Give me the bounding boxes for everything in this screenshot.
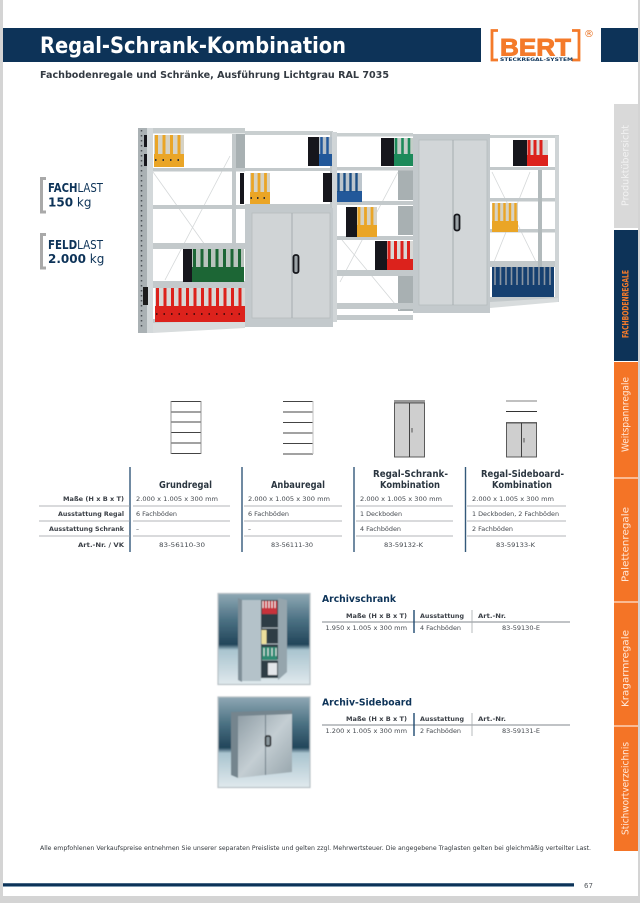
Archiv-Sideboard table: 83-59131-E [502, 728, 540, 735]
Archiv-Sideboard heading: Archiv-Sideboard [322, 698, 412, 708]
logo: BERT [492, 29, 594, 62]
tab: Kragarmregale [614, 602, 638, 726]
column: Regal-Sideboard-Kombination [472, 469, 564, 549]
column: Anbauregal: 2.000 x 1.005 x 300 mm [248, 496, 330, 503]
column: Grundregal: – [136, 526, 139, 533]
binders: red [155, 288, 245, 322]
tab: Produktübersicht: Produktübersicht [620, 125, 632, 206]
footer rule [3, 883, 574, 887]
tab: Kragarmregale: Kragarmregale [620, 630, 632, 707]
binders: yellow bay four [492, 203, 518, 232]
Archiv-Sideboard table [322, 713, 570, 736]
row labels: Maße (H x B x T) [63, 496, 124, 503]
binders: red top of bay four [513, 140, 548, 166]
logo: BERT: STECKREGAL-SYSTEM [500, 57, 573, 62]
cabinet: tall [413, 134, 490, 313]
footnote: Alle empfohlenen Verkaufspreise entnehmen Sie unserer separaten Preisliste und gelten zzgl. Mehrwertsteuer. Die angegebene Traglasten gelten bei gleichmäßig verteilter Last. [40, 845, 591, 852]
tab: Palettenregale [614, 478, 638, 602]
column: Regal-Schrank-Kombination: 4 Fachböden [360, 526, 401, 533]
tab: Stichwortverzeichnis [614, 726, 638, 851]
column: Grundregal: 6 Fachböden [136, 511, 177, 518]
column: Regal-Schrank-Kombination [360, 469, 448, 549]
product photo: shelving with cabinets [138, 128, 559, 333]
black binders on shelf two [240, 173, 332, 204]
Archivschrank table: Art.-Nr. [478, 613, 506, 620]
Archiv-Sideboard table: Maße (H x B x T) [346, 716, 407, 723]
side tabs [614, 104, 638, 851]
column: Regal-Schrank-Kombination: Kombination [380, 480, 440, 491]
tab: Stichwortverzeichnis: Stichwortverzeichnis [620, 742, 632, 835]
column: Anbauregal: – [248, 526, 251, 533]
binders: blue shelf two of bay three [337, 173, 362, 202]
row labels: Ausstattung Schrank [49, 526, 125, 533]
Archivschrank table: 1.950 x 1.005 x 300 mm [326, 625, 407, 632]
subtitle: Fachbodenregale und Schränke, Ausführung Lichtgrau RAL 7035 [40, 70, 389, 81]
Archiv-Sideboard table: Ausstattung [420, 716, 464, 723]
tab: Weitspannregale [614, 362, 638, 478]
comparison table [39, 467, 566, 552]
page number: 67 [584, 882, 593, 890]
photo: Archivschrank [218, 594, 310, 684]
tab: Weitspannregale: Weitspannregale [620, 377, 632, 452]
load callout: Fachlast: FACHLAST [48, 181, 104, 195]
column: Regal-Sideboard-Kombination: 83-59133-K [496, 542, 536, 549]
column: Regal-Sideboard-Kombination: 2.000 x 1.005 x 300 mm [472, 496, 554, 503]
column: Grundregal: Grundregal [159, 480, 212, 491]
tab: Palettenregale: Palettenregale [620, 507, 632, 582]
tab: Produktübersicht [614, 104, 638, 228]
column: Anbauregal: 6 Fachböden [248, 511, 289, 518]
binders: yellow shelf two [250, 173, 270, 204]
row labels [49, 496, 125, 549]
Archivschrank heading: Archivschrank [322, 594, 397, 605]
column: Anbauregal [248, 480, 330, 549]
load callout: Fachlast [42, 178, 104, 212]
bay 4 shelves [490, 135, 559, 138]
binders: green [183, 249, 244, 282]
column: Grundregal [136, 480, 218, 549]
column: Regal-Schrank-Kombination: 2.000 x 1.005 x 300 mm [360, 496, 442, 503]
bay 3 shelves [333, 133, 413, 136]
column: Anbauregal: Anbauregal [271, 480, 325, 491]
bay 1 shelves and frame [140, 168, 245, 323]
column: Regal-Sideboard-Kombination: 2 Fachböden [472, 526, 513, 533]
back panels [232, 134, 413, 311]
Archivschrank table: Ausstattung [420, 613, 464, 620]
load callout: Feldlast [42, 234, 104, 268]
column: Anbauregal: 83-56111-30 [271, 542, 313, 549]
binders: navy bay four [492, 267, 554, 297]
header band [3, 28, 638, 62]
Archiv-Sideboard table: Art.-Nr. [478, 716, 506, 723]
column: Regal-Sideboard-Kombination: 1 Deckboden, 2 Fachböden [472, 511, 559, 518]
binders: red shelf four of bay three [375, 241, 413, 270]
column: Regal-Schrank-Kombination: 1 Deckboden [360, 511, 402, 518]
row labels: Art.-Nr. / VK [78, 542, 124, 549]
binders: black and blue top [308, 137, 332, 166]
column: Regal-Sideboard-Kombination: Kombination [492, 480, 552, 491]
binders: green top of bay three [381, 138, 413, 166]
Archivschrank table: 4 Fachböden [420, 625, 461, 632]
column: Grundregal: 83-56110-30 [159, 542, 205, 549]
line drawing: Regal-Sideboard-Kombination [506, 401, 537, 457]
cabinet side and closed panel [238, 598, 242, 682]
column: Regal-Schrank-Kombination: 83-59132-K [384, 542, 424, 549]
column: Grundregal: 2.000 x 1.005 x 300 mm [136, 496, 218, 503]
load callout: Fachlast: 150 kg [48, 196, 91, 210]
tab: Fachbodenregale [614, 230, 638, 361]
column: Regal-Sideboard-Kombination: Regal-Sideboard- [481, 469, 564, 480]
line drawing: Grundregal [171, 401, 201, 454]
bay 2 top [245, 131, 333, 135]
load callout: Feldlast: FELDLAST [48, 238, 104, 252]
logo: BERT: BERT [500, 34, 571, 62]
cabinet: low [245, 208, 333, 327]
tab: Fachbodenregale: FACHBODENREGALE [622, 270, 632, 338]
line drawing: Anbauregal [283, 401, 313, 454]
open door [278, 598, 287, 680]
Archiv-Sideboard table: 1.200 x 1.005 x 300 mm [326, 728, 407, 735]
Archivschrank table: Maße (H x B x T) [346, 613, 407, 620]
Archivschrank table [322, 610, 570, 633]
photo: Archiv-Sideboard [218, 697, 310, 788]
interior [261, 600, 278, 678]
binders: yellow top left [154, 135, 184, 167]
binders: yellow shelf three of bay three [346, 207, 377, 237]
load callout: Feldlast: 2.000 kg [48, 252, 104, 266]
Archivschrank table: 83-59130-E [502, 625, 540, 632]
cross bracing [153, 156, 540, 310]
column: Regal-Schrank-Kombination: Regal-Schrank- [373, 469, 448, 480]
row labels: Ausstattung Regal [58, 511, 124, 518]
title: Regal-Schrank-Kombination [40, 34, 346, 59]
logo: BERT: ® [584, 29, 594, 40]
Archiv-Sideboard table: 2 Fachböden [420, 728, 461, 735]
line drawing: Regal-Schrank-Kombination [394, 400, 425, 457]
